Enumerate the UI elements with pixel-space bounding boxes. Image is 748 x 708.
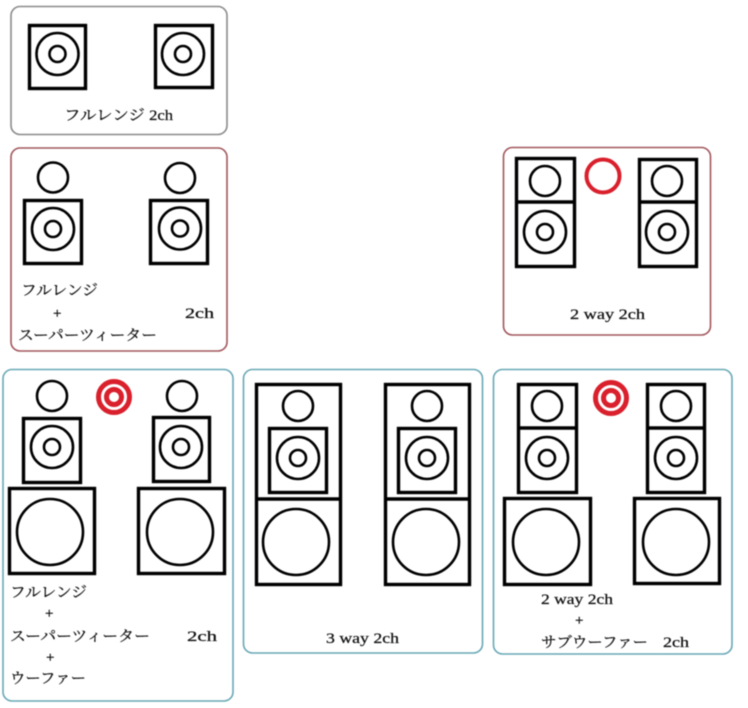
- label: full range plus super tweeter plus woofer: [10, 584, 150, 687]
- panel: full range 2ch: [11, 6, 227, 134]
- label: 2 way 2ch plus subwoofer: [541, 592, 648, 651]
- label: full range plus super tweeter: +: [53, 306, 61, 322]
- icon: red circle mark: [586, 160, 620, 192]
- label: full range plus super tweeter plus woofer: +: [45, 606, 53, 622]
- label: full range plus super tweeter plus woofer: ウーファー: [10, 671, 86, 687]
- label: 2 way 2ch plus subwoofer: サブウーファー: [541, 634, 648, 651]
- speaker: right 3 way: [385, 384, 470, 584]
- label: full range plus super tweeter plus woofer: スーパーツィーター: [10, 628, 150, 645]
- label: 2 way 2ch: 2 way 2ch: [570, 307, 646, 323]
- label: full range 2ch: フルレンジ 2ch: [64, 107, 174, 124]
- label: 2ch: 2ch: [187, 629, 218, 645]
- speaker: right tweeter, full range and woofer: [138, 381, 224, 574]
- label: full range plus super tweeter: フルレンジ: [21, 282, 98, 299]
- speaker: left full range: [30, 26, 86, 88]
- speaker: left 2 way with subwoofer: [504, 384, 590, 584]
- label: full range plus super tweeter: スーパーツィーター: [18, 327, 157, 344]
- panel: 2 way plus subwoofer 2ch: [494, 370, 732, 654]
- label: full range plus super tweeter: [18, 282, 157, 344]
- speaker: left 3 way: [256, 384, 341, 584]
- label: full range plus super tweeter plus woofer: フルレンジ: [10, 584, 87, 601]
- panel: full range plus super tweeter 2ch: [11, 148, 227, 351]
- icon: red double circle mark: [98, 382, 130, 412]
- label: full range plus super tweeter plus woofer: +: [46, 650, 54, 666]
- label: 2ch: 2ch: [663, 635, 690, 651]
- speaker: right 2 way: [639, 160, 697, 266]
- speaker: left 2 way: [516, 158, 575, 266]
- label: 2 way 2ch plus subwoofer: 2 way 2ch: [541, 592, 614, 608]
- speaker: right full range: [156, 26, 212, 88]
- label: 2 way 2ch plus subwoofer: +: [575, 613, 583, 629]
- label: 3 way 2ch: 3 way 2ch: [326, 631, 400, 647]
- panel: 3 way 2ch: [244, 370, 482, 653]
- panel: 2 way 2ch: [504, 148, 710, 335]
- speaker: left tweeter, full range and woofer: [10, 381, 94, 574]
- icon: red double circle mark: [596, 382, 626, 414]
- speaker: right 2 way with subwoofer: [634, 384, 720, 584]
- label: 2ch: 2ch: [185, 306, 215, 322]
- speaker: right with super tweeter: [150, 163, 208, 264]
- panel: full range plus super tweeter plus woofer 2ch: [3, 370, 233, 701]
- speaker: left with super tweeter: [24, 162, 82, 264]
